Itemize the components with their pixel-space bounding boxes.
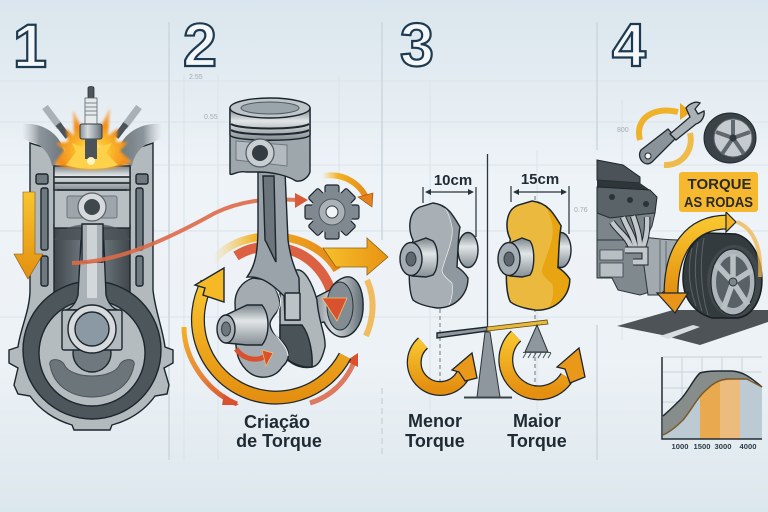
yellow ring arrow: [195, 268, 345, 398]
gear with arrow: [305, 175, 373, 239]
red flow arrow to gear: [72, 193, 308, 263]
badge: torque at wheels: [679, 172, 758, 212]
large wheel: [683, 233, 762, 318]
rear disc and shaft: [316, 277, 363, 337]
torque curve chart: [662, 357, 762, 451]
intake ports: [22, 107, 162, 166]
panel 4: torque at the wheels: [597, 102, 768, 451]
exhaust manifold: [612, 216, 647, 250]
torque curve chart: 1000: [672, 442, 688, 451]
wrench icon: [639, 102, 704, 165]
10cm dimension: 10cm: [434, 172, 472, 189]
crank disc: [39, 300, 145, 406]
label: lesser torque: Torque: [405, 431, 465, 451]
10cm dimension: [423, 172, 476, 237]
crescent counterweight: [50, 360, 134, 397]
15cm dimension: [511, 171, 569, 234]
outer arrowheads: [222, 394, 239, 405]
grey crank: [400, 203, 478, 308]
piston: [54, 166, 130, 228]
panel 1: engine cross-section: [9, 86, 173, 430]
rod big end: [62, 310, 122, 350]
dark crank pin: [280, 325, 312, 367]
torque curve chart: 1500: [694, 442, 710, 451]
yellow crank: [498, 201, 571, 310]
combustion flame: [54, 108, 132, 170]
step number 1: 1: [13, 12, 47, 80]
blueprint grid: [0, 75, 768, 460]
front journal: [226, 305, 268, 345]
torque curve chart: 4000: [740, 442, 756, 451]
red arrowhead on crank: [322, 298, 347, 321]
rear web: [280, 270, 325, 368]
connecting rod: [247, 172, 300, 320]
label: creation of torque: de Torque: [236, 431, 322, 451]
crankshaft: [217, 270, 363, 377]
cylinder interior: [54, 225, 130, 295]
panel 2: piston and crankshaft: [184, 98, 388, 451]
right output arrow: [323, 238, 388, 275]
badge: torque at wheels: AS RODAS: [684, 194, 753, 211]
downward arrow: [14, 192, 43, 279]
dashed centre lines: [440, 196, 535, 392]
small wheel icon: [704, 113, 756, 163]
step number 2: 2: [183, 11, 217, 79]
torque curve chart: 3000: [715, 442, 731, 451]
torque arrows behind crank: [184, 236, 373, 404]
seesaw: [437, 320, 551, 398]
transmission bell: [640, 237, 680, 295]
spark plug: [80, 86, 102, 165]
faint dimension labels: [189, 74, 629, 214]
step number 3: 3: [400, 11, 434, 79]
lower journal: [73, 334, 111, 372]
engine block: [9, 143, 173, 430]
connecting rod: [66, 222, 118, 310]
lower block: [597, 240, 664, 295]
label: greater torque: Maior: [513, 411, 561, 431]
smaller torque arrow: [414, 343, 477, 388]
small crank arrow: [236, 349, 266, 359]
front web: [235, 278, 288, 377]
15cm dimension: 15cm: [521, 171, 559, 188]
label: creation of torque: Criação: [244, 412, 310, 432]
faint dimension labels: 0.76: [574, 207, 588, 214]
road: [617, 310, 768, 345]
crank chamber: [23, 281, 161, 419]
label: lesser torque: Menor: [408, 411, 462, 431]
faint dimension labels: 800: [617, 127, 629, 134]
piston: [230, 98, 310, 181]
faint dimension labels: 0.55: [204, 114, 218, 121]
greater torque arrow: [506, 336, 585, 393]
label: greater torque: Torque: [507, 431, 567, 451]
step number 4: 4: [612, 11, 646, 79]
panel 3: lever arm comparison: [400, 154, 585, 451]
cylinder walls: [36, 174, 148, 286]
panel dividers: [169, 22, 597, 460]
centre divider: [486, 154, 488, 332]
engine and transmission: [597, 160, 680, 295]
curved wheel arrow: [657, 212, 760, 313]
badge: torque at wheels: TORQUE: [688, 176, 751, 193]
faint dimension labels: 2.55: [189, 74, 203, 81]
